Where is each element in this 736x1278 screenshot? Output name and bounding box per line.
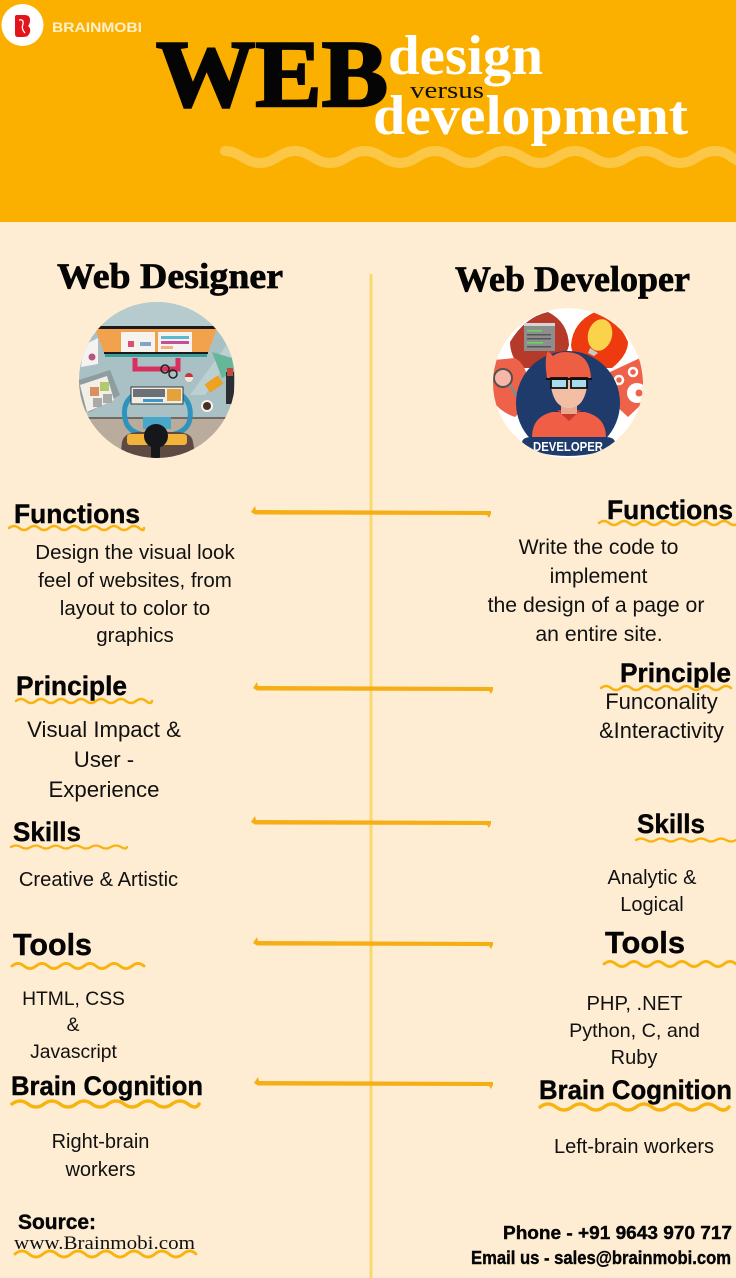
right: functions — [488, 495, 736, 646]
petal: magnifier — [493, 358, 526, 417]
right: tools: PHP, .NET — [586, 993, 683, 1015]
header wave decoration — [225, 151, 736, 163]
title — [156, 21, 688, 147]
left: brain cognition — [11, 1071, 203, 1181]
left: tools: Tools — [13, 927, 92, 962]
arrow: principle — [253, 682, 493, 694]
left: functions — [9, 499, 235, 647]
left: brain cognition: Right-brain — [52, 1131, 149, 1153]
left: functions: layout to color to — [60, 597, 210, 620]
left: principle: Principle — [16, 671, 127, 701]
title: design — [388, 25, 543, 87]
arrow: brain cognition — [254, 1077, 493, 1089]
left: principle: Experience — [48, 777, 160, 802]
right: functions: Functions — [607, 495, 733, 525]
arrow: skills — [251, 816, 491, 828]
right: tools — [569, 925, 736, 1069]
left: tools — [12, 927, 144, 1063]
left: skills: Skills — [13, 817, 81, 847]
right: tools: Tools — [605, 925, 685, 960]
left: brain cognition: Brain Cognition — [11, 1071, 203, 1101]
arrow: tools — [253, 937, 493, 949]
petal: gears — [610, 358, 643, 417]
left: functions: Functions — [14, 499, 140, 529]
right: brain cognition — [539, 1075, 732, 1158]
header banner — [0, 0, 736, 222]
right: skills — [608, 809, 736, 916]
illustration: designer desk — [78, 302, 236, 460]
title: versus — [410, 78, 484, 104]
right: tools: Ruby — [611, 1047, 657, 1069]
right: functions: an entire site. — [535, 623, 663, 646]
source: www.Brainmobi.com — [14, 1233, 195, 1254]
logo — [2, 4, 142, 46]
left: principle: User - — [74, 747, 134, 772]
right: functions: Write the code to — [519, 536, 678, 559]
title: WEB — [156, 21, 388, 127]
left: tools: Javascript — [30, 1042, 118, 1063]
right: functions: implement — [550, 565, 647, 588]
contact: Phone - +91 9643 970 717 — [503, 1223, 732, 1243]
source — [14, 1211, 196, 1257]
petal: light bulb — [571, 312, 628, 368]
title: development — [373, 85, 688, 147]
illustration: developer avatar — [492, 308, 647, 458]
right: brain cognition: Left-brain workers — [554, 1136, 714, 1158]
heading: web developer: Web Developer — [455, 259, 690, 299]
arrow: functions — [251, 506, 491, 518]
heading: web designer: Web Designer — [57, 256, 283, 296]
right: skills: Skills — [637, 809, 705, 839]
left: functions: feel of websites, from — [38, 569, 232, 592]
left: functions: Design the visual look — [35, 541, 235, 564]
right: skills: Analytic & — [608, 867, 697, 889]
right: tools: Python, C, and — [569, 1020, 700, 1042]
logo: BRAINMOBI — [52, 19, 142, 35]
right: principle — [599, 658, 731, 743]
right: principle: &Interactivity — [599, 718, 724, 743]
left: skills: Creative & Artistic — [19, 869, 178, 891]
right: principle: Principle — [620, 658, 731, 688]
source: Source: — [18, 1211, 96, 1234]
right: skills: Logical — [620, 894, 684, 916]
right: functions: the design of a page or — [488, 594, 704, 617]
illustration: developer avatar: DEVELOPER — [533, 439, 604, 454]
left: tools: HTML, CSS — [22, 989, 125, 1010]
right: principle: Funconality — [605, 689, 718, 714]
petal: code window — [510, 312, 569, 368]
contact — [471, 1223, 732, 1268]
left: principle — [16, 671, 181, 802]
left: principle: Visual Impact & — [27, 717, 181, 742]
left: functions: graphics — [96, 624, 174, 647]
left: brain cognition: workers — [64, 1159, 136, 1181]
left: tools: & — [67, 1015, 80, 1036]
right: brain cognition: Brain Cognition — [539, 1075, 732, 1105]
center divider — [370, 274, 372, 1278]
left: skills — [11, 817, 178, 891]
